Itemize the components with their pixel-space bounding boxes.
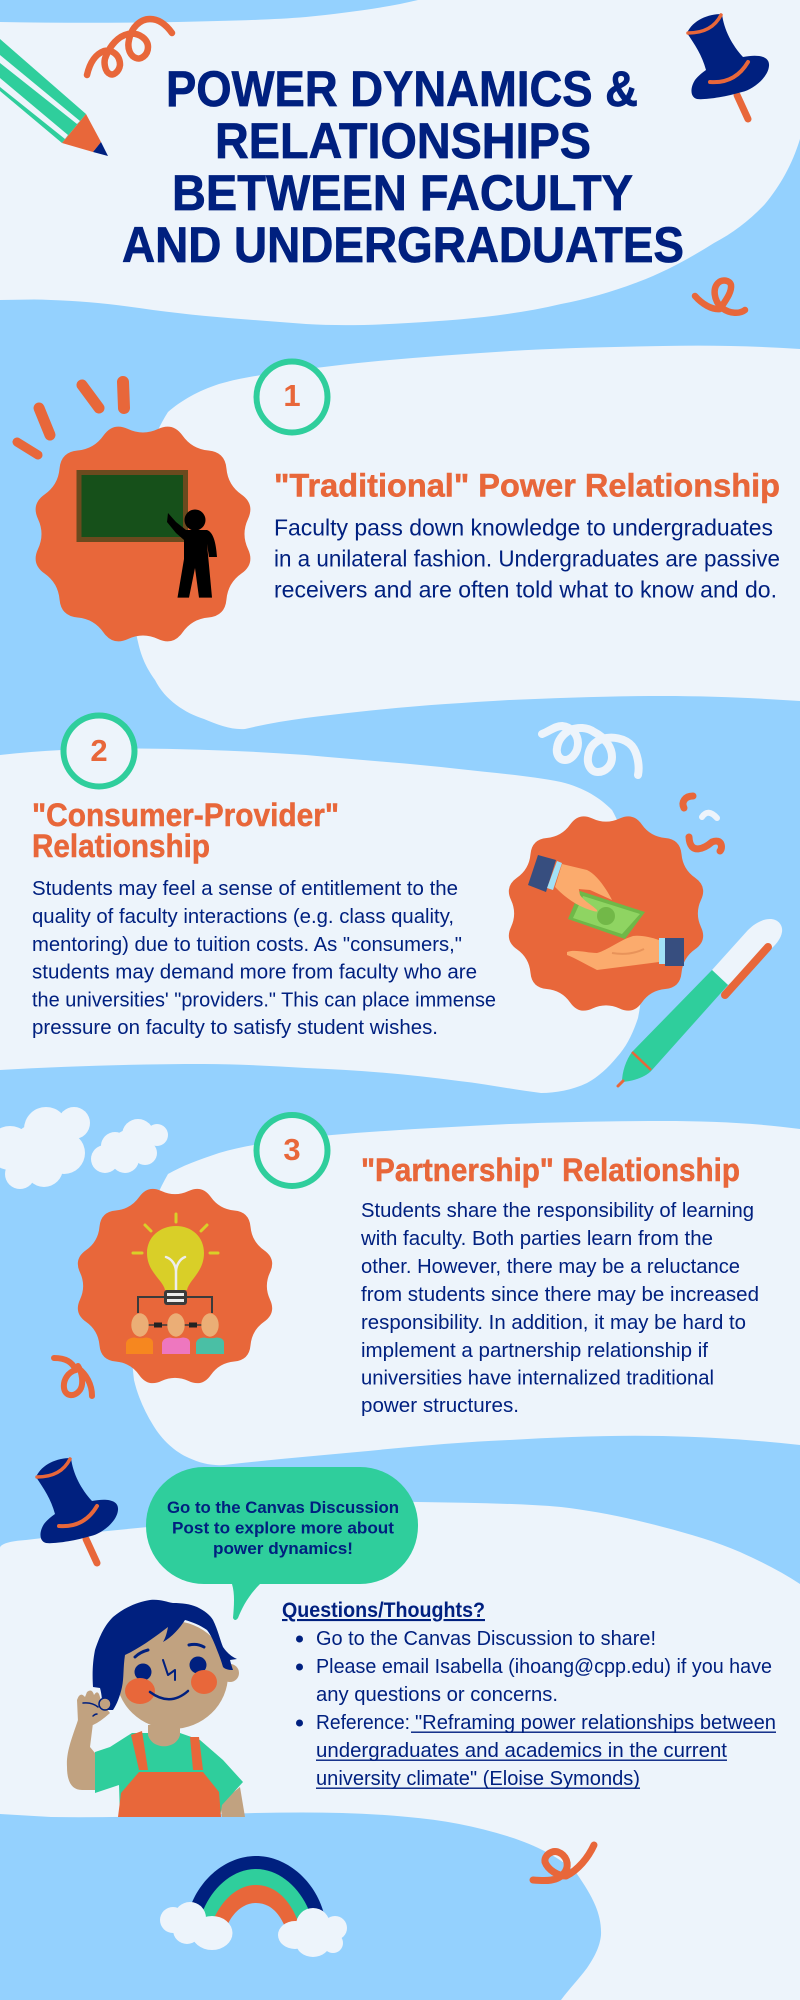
section 3 body text: other. However, there may be a reluctance xyxy=(361,1255,740,1278)
footer questions block: undergraduates and academics in the current xyxy=(316,1739,727,1762)
section 3 body text: with faculty. Both parties learn from the xyxy=(360,1227,713,1250)
section 2 body text: quality of faculty interactions (e.g. class quality, xyxy=(32,905,454,928)
footer questions block: "Reframing power relationships between xyxy=(415,1711,776,1734)
icon: orange squiggle right xyxy=(695,281,745,313)
badge: number 1: 1 xyxy=(283,378,301,413)
section 2 body text: pressure on faculty to satisfy student wishes. xyxy=(32,1016,438,1039)
section 3 body text: implement a partnership relationship if xyxy=(361,1339,708,1362)
panel: section 2 background xyxy=(0,748,643,1093)
section 1 body text: Faculty pass down knowledge to undergraduates xyxy=(274,514,773,540)
panel: header background xyxy=(0,0,800,325)
footer questions block: Reference: xyxy=(316,1711,410,1734)
icon: small squiggles xyxy=(683,796,721,851)
section 2 body text: the universities' "providers." This can place immense xyxy=(32,988,496,1012)
speech bubble callout: Go to the Canvas Discussion xyxy=(167,1498,399,1517)
badge: number 2 xyxy=(64,716,134,786)
illustration: child with waving hand xyxy=(67,1600,245,1817)
section 3 body text: Students share the responsibility of learning xyxy=(361,1199,754,1222)
title: AND UNDERGRADUATES xyxy=(122,217,684,273)
icon: orange swirl top xyxy=(87,19,172,75)
section 1 body text: receivers and are often told what to know and do. xyxy=(274,576,777,602)
illustration: hands exchanging money xyxy=(509,816,703,1011)
section 2 heading: "Consumer-Provider" xyxy=(32,797,339,833)
illustration: rainbow with clouds xyxy=(160,1856,347,1957)
badge: number 1 xyxy=(256,362,328,432)
section 2 body text: students may demand more from faculty who are xyxy=(32,960,477,984)
section 3 body text: power structures. xyxy=(361,1394,519,1417)
section 2 body text xyxy=(32,877,496,1039)
section 1 heading: "Traditional" Power Relationship xyxy=(274,468,780,504)
panel: section 3 background xyxy=(131,1121,800,1465)
section 3 body text: responsibility. In addition, it may be hard to xyxy=(361,1311,746,1334)
title: RELATIONSHIPS xyxy=(215,113,591,169)
speech bubble callout xyxy=(146,1467,418,1620)
section 3 body text: from students since there may be increased xyxy=(361,1283,759,1306)
icon: orange squiggle bottom right xyxy=(533,1845,594,1881)
icon: emphasis rays xyxy=(17,382,124,455)
section 1 body text xyxy=(274,514,780,602)
section 3 body text: universities have internalized traditional xyxy=(361,1366,714,1390)
title: BETWEEN FACULTY xyxy=(172,165,633,221)
icon: orange squiggle left xyxy=(54,1358,92,1396)
section 2 heading: Relationship xyxy=(32,828,210,864)
footer questions block: university climate" (Eloise Symonds) xyxy=(316,1767,640,1790)
badge: number 3 xyxy=(256,1115,328,1186)
icon: white swirl xyxy=(542,726,639,775)
icon: push pin lower left xyxy=(36,1458,118,1563)
section 2 body text: Students may feel a sense of entitlement to the xyxy=(32,877,458,900)
section 3 heading: "Partnership" Relationship xyxy=(361,1152,740,1188)
badge: number 2: 2 xyxy=(90,733,108,768)
section 2 body text: mentoring) due to tuition costs. As "consumers," xyxy=(32,933,462,956)
footer questions block: Go to the Canvas Discussion to share! xyxy=(316,1627,656,1650)
footer questions block: Questions/Thoughts? xyxy=(282,1599,485,1622)
section 2 heading xyxy=(32,797,339,864)
footer questions block: Please email Isabella (ihoang@cpp.edu) if you have xyxy=(316,1655,772,1678)
illustration: lightbulb and team xyxy=(78,1189,272,1383)
title xyxy=(122,61,684,273)
speech bubble callout: power dynamics! xyxy=(213,1539,353,1558)
footer questions block xyxy=(282,1599,776,1790)
section 1 body text: in a unilateral fashion. Undergraduates are passive xyxy=(274,546,780,572)
panel: footer background xyxy=(0,1502,800,2000)
icon: pencil xyxy=(0,39,108,156)
speech bubble callout: Post to explore more about xyxy=(172,1518,394,1538)
footer questions block: any questions or concerns. xyxy=(316,1683,558,1706)
section 3 body text xyxy=(360,1199,759,1417)
badge: number 3: 3 xyxy=(283,1132,301,1167)
illustration: teacher at chalkboard xyxy=(36,427,250,641)
icon: clouds xyxy=(0,1107,168,1189)
illustration: pen xyxy=(618,919,782,1086)
panel: section 1 background xyxy=(132,346,800,729)
icon: push pin top right xyxy=(687,14,769,119)
title: POWER DYNAMICS & xyxy=(166,61,638,117)
